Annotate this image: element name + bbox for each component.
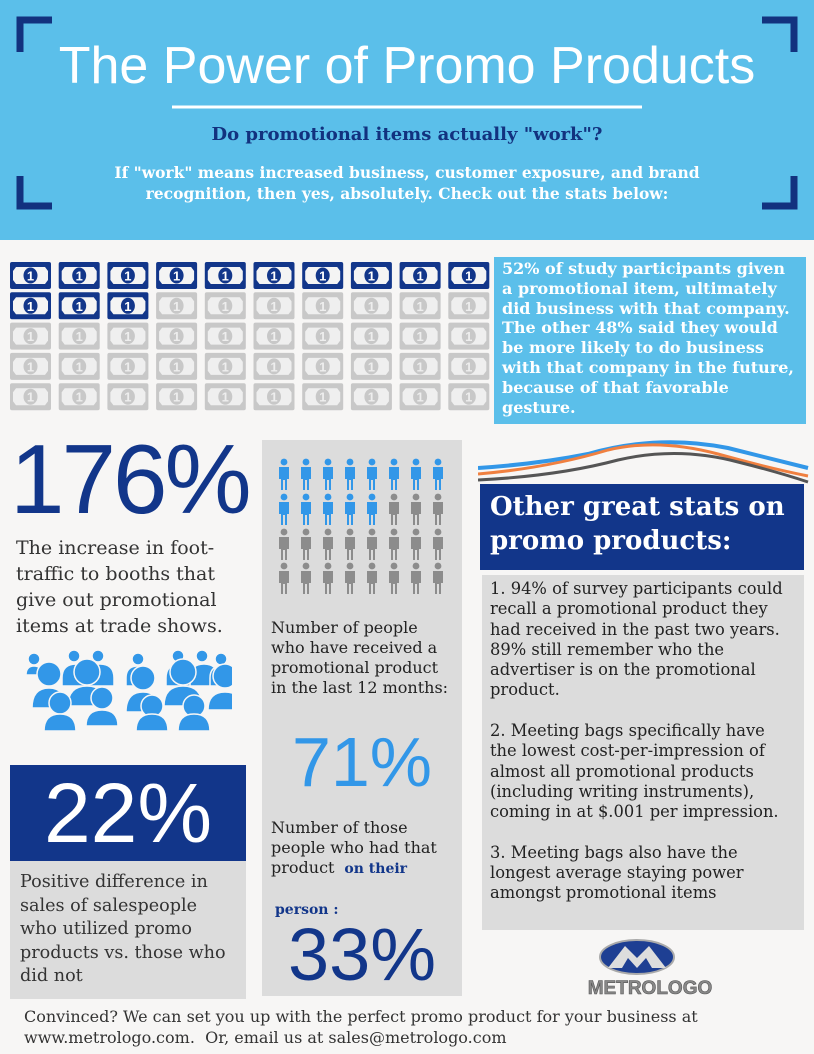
decorative waves — [478, 440, 808, 484]
icon grid: people — [279, 458, 443, 594]
intro text: If "work" means increased business, customer exposure, and brand recognition, then yes, absolutely. Check out the stats below: — [114, 163, 700, 203]
text: sales difference: sales of salespeople — [20, 896, 197, 916]
callout: 52% stat: a promotional item, ultimately — [502, 279, 777, 298]
text: number of people: Number of people — [271, 618, 418, 637]
stat 1: 1. 94% of survey participants could — [490, 579, 783, 598]
callout: 52% stat: because of that favorable — [502, 378, 729, 397]
callout: 52% stat: be more likely to do business — [502, 338, 764, 357]
callout: 52% stat: 52% of study participants given — [502, 259, 785, 278]
text: foot traffic — [16, 537, 223, 637]
title: The Power of Promo Products — [59, 37, 755, 95]
stat 1: had received in the past two years. — [490, 620, 780, 639]
text: sales difference: did not — [20, 966, 83, 986]
logo: MetroLogo — [588, 939, 712, 998]
text: foot traffic: give out promotional — [16, 589, 217, 611]
text: foot traffic: The increase in foot- — [16, 537, 214, 559]
text: foot traffic: traffic to booths that — [16, 563, 215, 585]
stat 1: product. — [490, 680, 560, 699]
callout: 52% stat: gesture. — [502, 398, 576, 417]
stat 3: longest average staying power — [490, 863, 744, 882]
panel: 22%: 22% — [44, 766, 212, 860]
stat 1: recall a promotional product they — [490, 599, 768, 618]
text: number of people: who have received a — [271, 638, 437, 657]
icon: crowd — [26, 650, 232, 730]
stat 1: advertiser is on the promotional — [490, 660, 756, 679]
stat 2 — [490, 721, 779, 821]
text: sales difference: Positive difference in — [20, 872, 208, 892]
footer text: Convinced? We can set you up with the perfect promo product for your business at www.metrologo.com. Or, email us at sales@metrologo.com — [24, 1007, 698, 1047]
stat: 71%: 71% — [292, 723, 432, 801]
text: number of those: Number of those — [271, 818, 408, 837]
corner brackets — [16, 16, 798, 210]
text: foot traffic: items at trade shows. — [16, 615, 223, 637]
stat 2: almost all promotional products — [490, 762, 754, 781]
heading: other great stats: Other great stats on promo products: — [490, 492, 785, 556]
text: person: person : — [275, 902, 339, 918]
stat 1 — [490, 579, 783, 699]
stat 2: 2. Meeting bags specifically have — [490, 721, 765, 740]
text: number of those: people who had that — [271, 838, 437, 857]
text: number of people — [271, 618, 448, 697]
stat 1: 89% still remember who the — [490, 640, 724, 659]
bills grid — [10, 262, 490, 410]
callout: 52% stat: The other 48% said they would — [502, 318, 778, 337]
panel: middle column — [262, 440, 462, 996]
text: number of those: product on their — [271, 858, 407, 877]
stat 2: (including writing instruments), — [490, 782, 754, 801]
heading: other great stats — [480, 484, 804, 570]
panel: stats list — [482, 575, 804, 930]
text: number of people: in the last 12 months: — [271, 678, 448, 697]
text: number of those — [271, 818, 437, 877]
subtitle: Do promotional items actually "work"? — [212, 124, 602, 145]
text: sales difference — [10, 861, 246, 999]
stat: 33%: 33% — [288, 913, 436, 996]
callout: 52% stat — [494, 257, 806, 424]
stat: 176%: 176% — [10, 424, 249, 534]
header banner — [0, 0, 814, 240]
text: sales difference: who utilized promo — [20, 919, 192, 939]
stat 2: coming in at $.001 per impression. — [490, 802, 779, 821]
stat 3 — [490, 843, 744, 902]
text: sales difference: products vs. those who — [20, 942, 226, 962]
callout: 52% stat: did business with that company. — [502, 299, 790, 318]
callout: 52% stat: with that company in the future, — [502, 358, 794, 377]
stat 3: amongst promotional items — [490, 883, 716, 902]
text: number of people: promotional product — [271, 658, 438, 677]
stat 3: 3. Meeting bags also have the — [490, 843, 738, 862]
stat 2: the lowest cost-per-impression of — [490, 741, 765, 760]
panel: 22% — [10, 765, 246, 861]
